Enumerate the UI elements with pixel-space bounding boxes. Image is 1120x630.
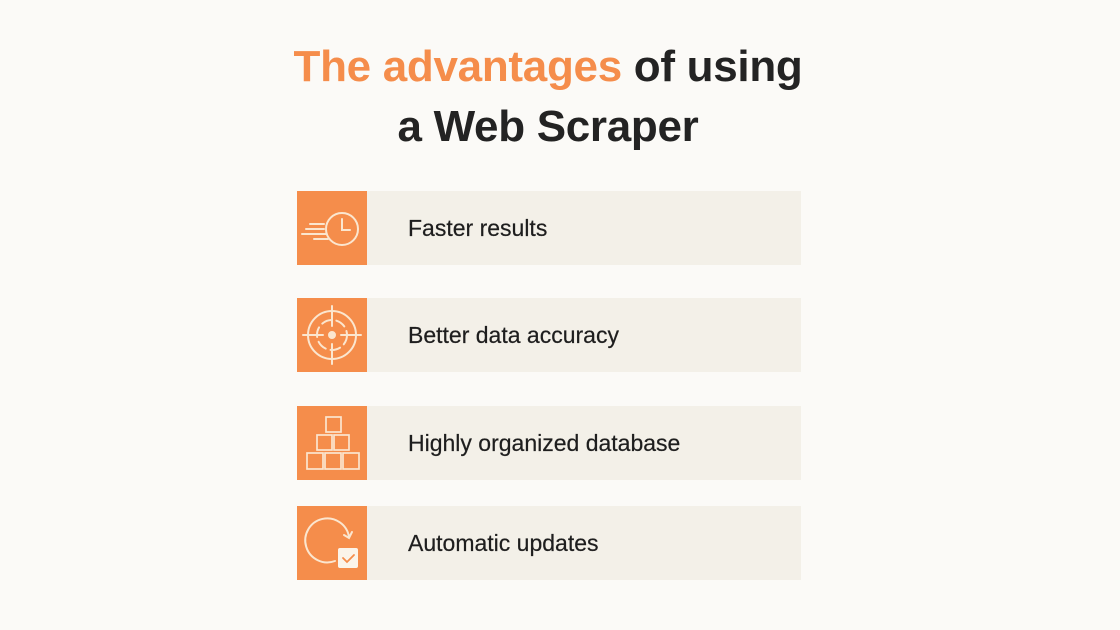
text: Better data accuracy bbox=[408, 322, 619, 348]
text: Automatic updates bbox=[408, 530, 599, 556]
title: a Web Scraper bbox=[398, 102, 698, 151]
row: highly organized database bbox=[297, 406, 801, 480]
row: faster results bbox=[297, 191, 801, 265]
icon: refresh with check bbox=[297, 506, 367, 580]
row: better data accuracy bbox=[297, 298, 801, 372]
icon: target bbox=[297, 298, 367, 372]
text: Faster results bbox=[408, 215, 547, 241]
icon: stacked boxes bbox=[297, 406, 367, 480]
title: The advantages of using bbox=[294, 42, 802, 91]
text: Highly organized database bbox=[408, 430, 680, 456]
icon: clock with speed lines bbox=[297, 191, 367, 265]
title bbox=[294, 42, 802, 151]
row: automatic updates bbox=[297, 506, 801, 580]
